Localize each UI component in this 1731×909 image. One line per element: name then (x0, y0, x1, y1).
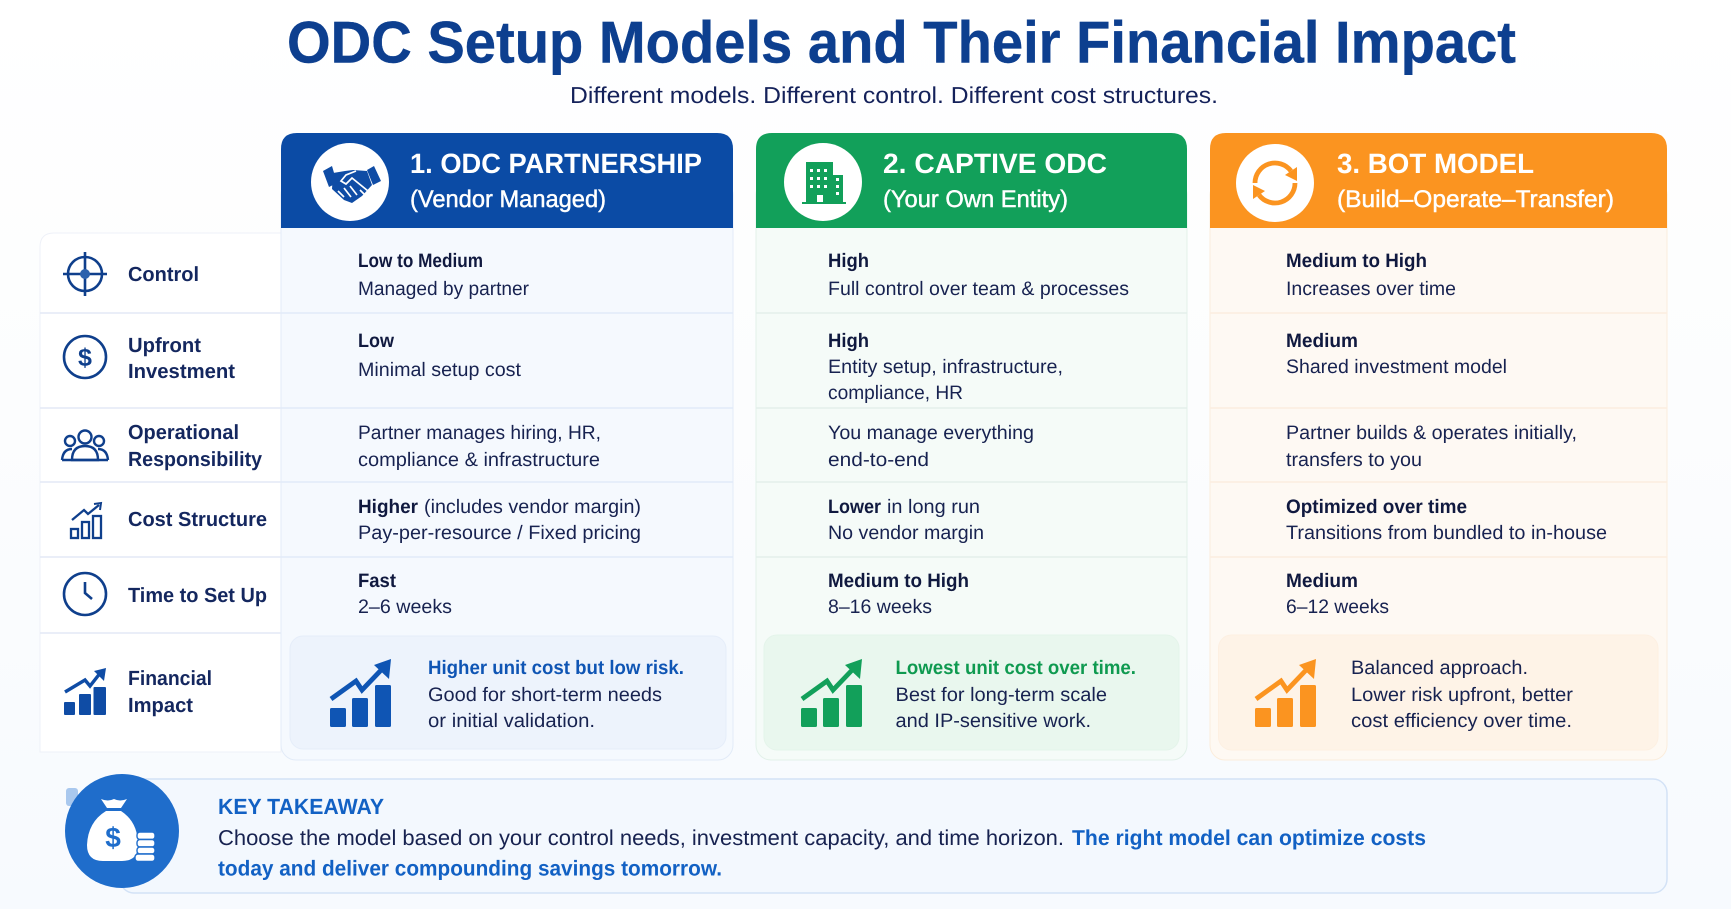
cell: operational responsibility: transfers to you (1286, 449, 1422, 471)
label: operational responsibility: Responsibility (128, 448, 263, 471)
cell: control: Medium to High (1286, 250, 1427, 272)
text: takeaway body: Choose the model based on your control needs, investment capacity, and time horizon. (218, 826, 1064, 850)
icon: growth chart (1255, 659, 1316, 727)
cell: time to set up (828, 570, 969, 618)
heading: captive ODC (883, 148, 1107, 213)
icon: handshake (311, 143, 389, 221)
icon: growth chart (330, 659, 391, 727)
label: upfront investment: Investment (128, 360, 235, 383)
cell: cost structure: in long run (887, 496, 980, 518)
heading: key takeaway: KEY TAKEAWAY (218, 794, 384, 819)
cell: upfront investment: Minimal setup cost (358, 359, 522, 381)
cell: upfront investment: Low (358, 330, 395, 352)
heading: captive ODC: 2. CAPTIVE ODC (883, 148, 1107, 179)
callout: financial impact: or initial validation. (428, 710, 595, 732)
heading: ODC partnership (410, 148, 702, 213)
label: financial impact: Financial (128, 667, 212, 690)
cell: time to set up: Fast (358, 570, 396, 592)
heading: BOT model (1337, 148, 1614, 213)
cell: operational responsibility: Partner manages hiring, HR, (358, 422, 601, 444)
icon: money bag (65, 774, 179, 888)
label: time to set up: Time to Set Up (128, 584, 267, 607)
text: takeaway body (218, 826, 1426, 880)
cell: control: Full control over team & processes (828, 278, 1129, 300)
cell: control (828, 250, 1129, 300)
icon: upfront investment dollar (64, 336, 106, 378)
heading: captive ODC: (Your Own Entity) (883, 186, 1068, 213)
cell: time to set up: Medium (1286, 570, 1358, 592)
cell: upfront investment: High (828, 330, 869, 352)
cell: upfront investment: compliance, HR (828, 382, 963, 404)
icon: control target (63, 252, 107, 296)
cell: control: High (828, 250, 869, 272)
icon: cost structure chart (71, 503, 101, 538)
cell: control: Increases over time (1286, 278, 1456, 300)
label: upfront investment: Upfront (128, 334, 201, 357)
heading: ODC partnership: (Vendor Managed) (410, 186, 606, 213)
cell: time to set up: 2–6 weeks (358, 596, 452, 618)
cell: upfront investment: Entity setup, infrastructure, (828, 356, 1063, 378)
cell: cost structure: Optimized over time (1286, 496, 1467, 518)
label: cost structure: Cost Structure (128, 508, 267, 531)
callout: financial impact: Lower risk upfront, better (1351, 684, 1574, 706)
callout: financial impact: and IP-sensitive work. (896, 710, 1091, 732)
cell: cost structure: Pay-per-resource / Fixed pricing (358, 522, 641, 544)
callout: financial impact: Best for long-term scale (896, 684, 1107, 706)
icon: office building (784, 143, 862, 221)
cell: cost structure: Higher (358, 496, 418, 518)
panel: BOT model (1210, 133, 1667, 760)
icon: financial impact chart (64, 668, 106, 715)
cell: control (1286, 250, 1456, 300)
cell: upfront investment (828, 330, 1063, 404)
cell: operational responsibility: compliance & infrastructure (358, 449, 600, 471)
label: upfront investment (128, 334, 235, 383)
cell: cost structure (828, 496, 984, 544)
cell: control: Managed by partner (358, 278, 529, 300)
callout: financial impact (1218, 635, 1658, 750)
cell: cost structure: No vendor margin (828, 522, 984, 544)
cell: time to set up (358, 570, 452, 618)
cell: operational responsibility (828, 422, 1034, 471)
cell: operational responsibility: end-to-end (828, 449, 929, 471)
callout: financial impact: Lowest unit cost over time. (896, 657, 1136, 679)
callout: financial impact (764, 635, 1179, 750)
cell: operational responsibility: Partner builds & operates initially, (1286, 422, 1577, 444)
panel: ODC partnership (281, 133, 733, 760)
panel: key takeaway (65, 774, 1667, 893)
icon: growth chart (801, 659, 862, 727)
heading: ODC partnership: 1. ODC PARTNERSHIP (410, 148, 702, 179)
cell: cost structure (358, 496, 641, 544)
panel: captive ODC (756, 133, 1187, 760)
cell: upfront investment: Shared investment model (1286, 356, 1507, 378)
icon: operational responsibility people (62, 430, 108, 460)
callout: financial impact: cost efficiency over time. (1351, 710, 1572, 732)
icon: money bag: $ (105, 822, 121, 853)
cell: operational responsibility (358, 422, 601, 471)
heading: BOT model: (Build–Operate–Transfer) (1337, 186, 1614, 213)
cell: control (358, 250, 529, 300)
callout: financial impact: Higher unit cost but low risk. (428, 657, 684, 679)
label: control: Control (128, 263, 199, 286)
cell: upfront investment (358, 330, 522, 381)
icon: clock (64, 573, 106, 615)
cell: cost structure: (includes vendor margin) (424, 496, 641, 518)
cell: time to set up: Medium to High (828, 570, 969, 592)
icon: upfront investment dollar: $ (78, 344, 92, 372)
cell: time to set up (1286, 570, 1389, 618)
cell: cost structure: Lower (828, 496, 881, 518)
cell: upfront investment: Medium (1286, 330, 1358, 352)
cell: time to set up: 6–12 weeks (1286, 596, 1389, 618)
text: takeaway body: today and deliver compounding savings tomorrow. (218, 856, 722, 880)
cell: time to set up: 8–16 weeks (828, 596, 932, 618)
icon: refresh cycle (1236, 144, 1314, 222)
label: operational responsibility: Operational (128, 421, 239, 444)
title: ODC Setup Models and Their Financial Impact (287, 10, 1516, 76)
cell: control: Low to Medium (358, 250, 483, 272)
label: financial impact: Impact (128, 694, 193, 717)
cell: cost structure: Transitions from bundled to in-house (1286, 522, 1607, 544)
cell: upfront investment (1286, 330, 1507, 378)
label: operational responsibility (128, 421, 263, 471)
subtitle: Different models. Different control. Different cost structures. (570, 82, 1218, 108)
callout: financial impact (290, 636, 726, 749)
text: takeaway body: The right model can optimize costs (1072, 826, 1426, 850)
heading: BOT model: 3. BOT MODEL (1337, 148, 1534, 179)
panel: row labels (40, 233, 281, 752)
label: financial impact (128, 667, 212, 717)
callout: financial impact: Good for short-term needs (428, 684, 662, 706)
callout: financial impact: Balanced approach. (1351, 657, 1528, 679)
cell: operational responsibility: You manage everything (828, 422, 1034, 444)
cell: operational responsibility (1286, 422, 1577, 471)
cell: cost structure (1286, 496, 1607, 544)
